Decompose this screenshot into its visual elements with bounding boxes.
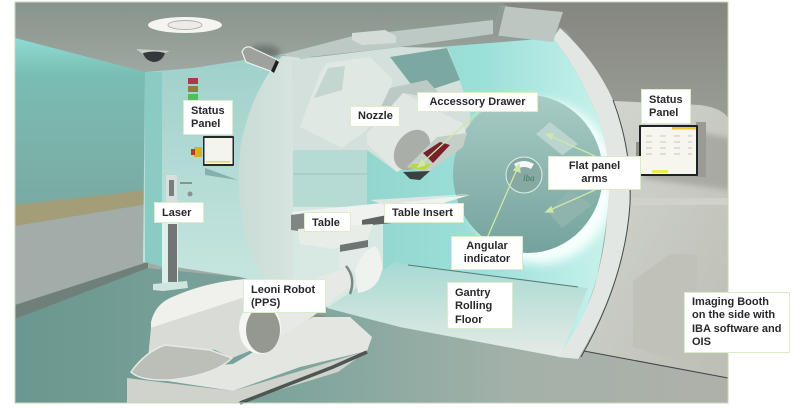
label: imaging booth: OIS <box>692 336 711 348</box>
door and wall panel <box>143 54 300 292</box>
rolling floor <box>327 262 588 357</box>
label: table insert <box>384 203 464 223</box>
label: leoni robot: Leoni Robot <box>251 284 315 296</box>
label: laser: Laser <box>162 207 191 219</box>
robot base <box>127 279 372 403</box>
robot arm <box>243 246 382 350</box>
ceiling unit <box>280 6 563 58</box>
label: accessory drawer <box>417 92 538 112</box>
nozzle housing <box>300 48 467 177</box>
label: table <box>304 212 351 232</box>
left status panel screen <box>203 136 234 166</box>
gantry front arc <box>239 56 400 308</box>
pointer: flat panel upper <box>546 134 595 156</box>
flat panel arm lower <box>548 190 592 228</box>
label: status panel left: Status <box>191 105 225 117</box>
label: leoni robot: (PPS) <box>251 297 280 309</box>
label: angular indicator <box>451 236 523 270</box>
flat panel disc <box>453 95 603 253</box>
label: imaging booth: on the side with <box>692 309 775 321</box>
label: flat panel arms: Flat panel <box>569 160 620 172</box>
label: angular indicator: Angular <box>466 240 508 252</box>
label: status panel right <box>641 89 691 124</box>
label: flat panel arms: arms <box>581 173 608 185</box>
ceiling light <box>148 17 222 33</box>
label: status panel left <box>183 100 233 135</box>
label: status panel right: Status <box>649 94 683 106</box>
label: leoni robot <box>243 279 326 313</box>
label: flat panel arms <box>548 156 641 190</box>
label: imaging booth: Imaging Booth <box>692 296 769 308</box>
wall signal tower <box>188 78 198 100</box>
label: nozzle <box>350 106 400 127</box>
glow around disc <box>465 100 615 264</box>
label: nozzle: Nozzle <box>358 110 393 122</box>
label: gantry rolling floor: Gantry <box>455 287 490 299</box>
label: imaging booth: IBA software and <box>692 323 781 335</box>
gantry white arc band <box>553 28 630 359</box>
emergency stop button <box>191 147 202 157</box>
wall-mounted laser unit <box>242 45 280 73</box>
floor <box>15 268 728 403</box>
label: gantry rolling floor: Floor <box>455 314 482 326</box>
pointer: accessory drawer <box>418 112 478 167</box>
angular indicator dial: iba <box>523 173 535 183</box>
label: gantry rolling floor <box>447 282 513 329</box>
angular indicator dial <box>506 157 542 193</box>
dome camera <box>136 49 170 62</box>
upper right wall <box>500 2 728 118</box>
upper gantry shell behind nozzle <box>292 47 470 172</box>
label: table: Table <box>312 217 340 229</box>
label: status panel right: Panel <box>649 107 678 119</box>
label: status panel left: Panel <box>191 118 220 130</box>
pointer: angular indicator <box>488 164 520 236</box>
label: angular indicator: indicator <box>464 253 510 265</box>
label: accessory drawer: Accessory Drawer <box>429 96 526 108</box>
imaging booth wall at right <box>584 101 740 378</box>
label: imaging booth <box>684 292 790 353</box>
flat panel arm upper <box>536 122 578 155</box>
table <box>291 194 470 254</box>
laser pillar <box>153 222 188 291</box>
treatment cavity <box>293 38 609 357</box>
accessory drawer <box>403 133 467 180</box>
label: laser <box>154 202 204 223</box>
cavity wall left panels <box>293 150 383 307</box>
right status panel bracket and screen <box>636 122 714 177</box>
pointer: flat panel lower <box>546 190 595 212</box>
label: gantry rolling floor: Rolling <box>455 300 492 312</box>
label: table insert: Table Insert <box>392 207 453 219</box>
left wall with wood rail <box>15 38 148 319</box>
